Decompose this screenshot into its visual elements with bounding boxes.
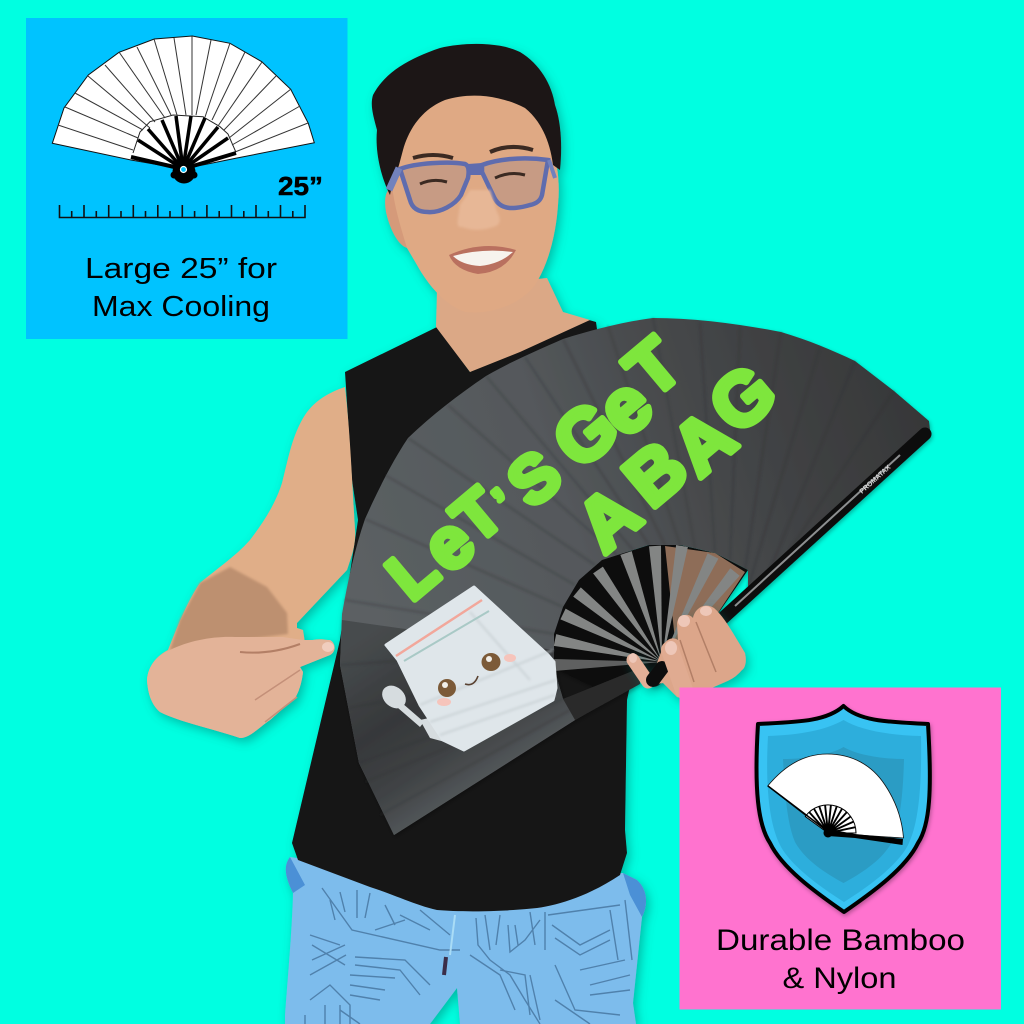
nylon fabric — [340, 318, 930, 835]
spoon — [378, 681, 445, 742]
fan handle stick — [655, 434, 925, 680]
caption: & Nylon — [782, 962, 896, 995]
skin seen through ribs — [665, 546, 745, 640]
face — [392, 82, 559, 313]
slogan: S — [493, 436, 575, 520]
handle highlight — [735, 455, 900, 606]
black tank top — [292, 314, 640, 911]
bamboo rib gap showing body behind — [554, 545, 748, 690]
shorts with circuit pattern — [285, 857, 646, 1024]
head — [372, 44, 561, 313]
bamboo ribs — [554, 545, 740, 671]
panel: size — [26, 18, 348, 339]
ear — [385, 188, 412, 248]
zipper stripes — [396, 600, 482, 656]
mouth — [449, 246, 516, 274]
glasses — [389, 158, 555, 212]
arm and hand — [147, 387, 355, 738]
neck — [436, 278, 590, 372]
kawaii bag character — [378, 587, 556, 750]
slogan: G — [538, 386, 633, 483]
slogan: G — [694, 348, 791, 449]
slogan: e — [581, 360, 668, 453]
smile — [465, 676, 478, 685]
eyes — [438, 653, 500, 697]
caption: Durable Bamboo — [716, 924, 965, 957]
slogan: A — [561, 469, 655, 567]
person — [147, 44, 646, 1024]
finger creases — [680, 622, 716, 682]
nose — [458, 190, 500, 230]
large fan — [340, 318, 930, 835]
fabric pleats — [340, 318, 894, 815]
fan in shield — [768, 754, 904, 838]
cheeks — [437, 654, 516, 706]
palm and fingers — [650, 606, 746, 700]
icon: shield with fan — [756, 706, 930, 912]
gripping hand — [629, 606, 746, 700]
handle brand label: PROMATAX — [859, 464, 893, 495]
lower fabric shade — [340, 620, 575, 835]
ruler — [60, 205, 305, 218]
caption: Max Cooling — [92, 291, 270, 323]
hair — [372, 44, 561, 195]
caption: Large 25” for — [85, 253, 277, 285]
icon: white fan — [52, 36, 314, 184]
bag body — [386, 587, 556, 750]
slogan: L — [373, 531, 451, 613]
finger over handle — [670, 650, 684, 690]
eyebrows — [413, 147, 533, 158]
slogan: T — [438, 474, 516, 556]
slogan: B — [608, 424, 702, 522]
dark rib strip — [563, 668, 640, 720]
panel: material — [680, 688, 1001, 1010]
slogan: A — [656, 393, 750, 491]
slogan: T — [611, 323, 696, 413]
slogan — [373, 323, 791, 613]
eyes closed — [420, 174, 525, 184]
fingernails — [629, 606, 712, 663]
slogan: ’ — [486, 482, 521, 521]
size value: 25” — [278, 171, 323, 201]
small finger — [633, 660, 648, 682]
slogan: e — [407, 501, 489, 588]
handle end — [653, 668, 662, 680]
bag folds — [420, 612, 556, 735]
